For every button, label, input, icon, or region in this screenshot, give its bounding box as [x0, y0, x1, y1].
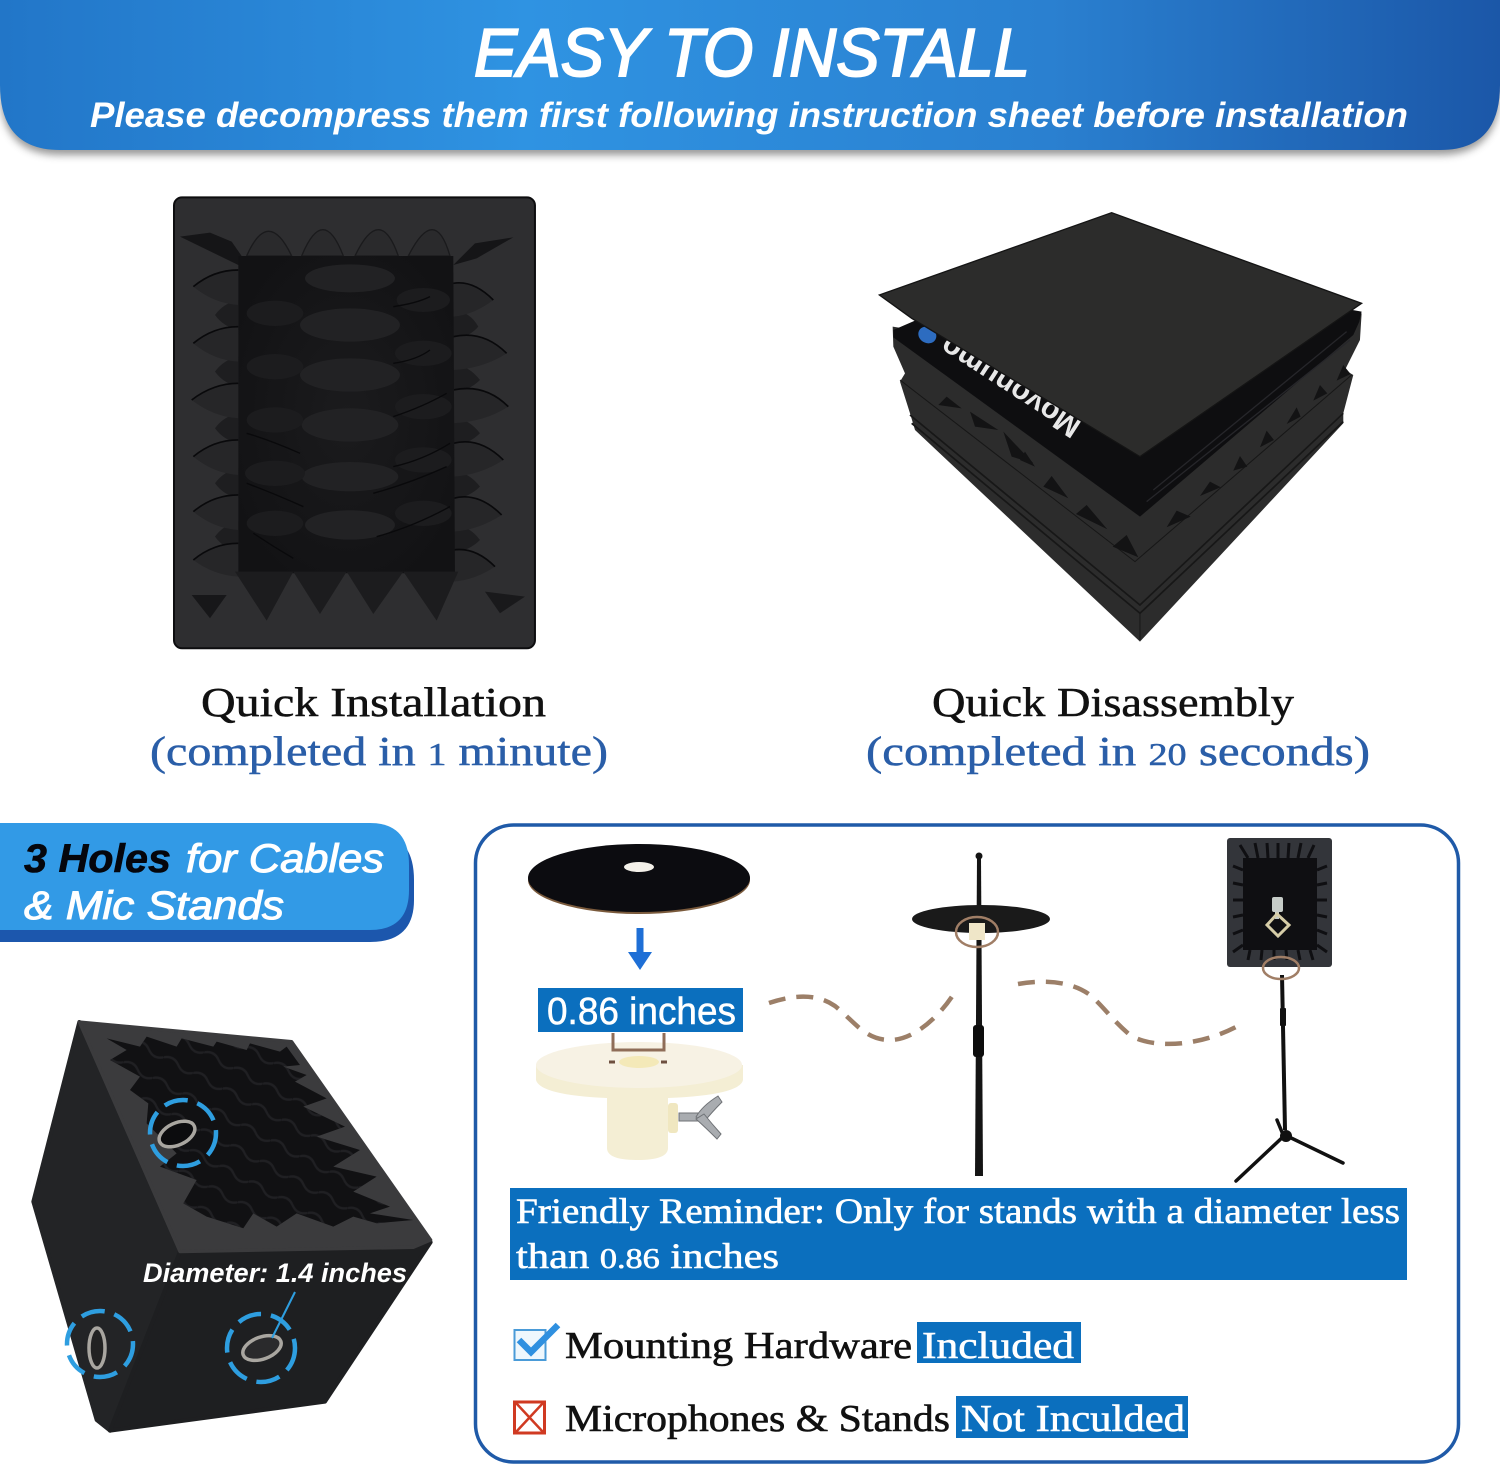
black inner layer [893, 267, 1362, 517]
ring: left hole [67, 1311, 133, 1377]
caption: quick disassembly [866, 679, 1370, 774]
title: EASY TO INSTALL [474, 15, 1030, 91]
right lobes [453, 310, 480, 553]
item: mounting hardware included: Mounting Hardware [565, 1325, 912, 1367]
friendly reminder: Friendly Reminder: Only for stands with a diameter less [516, 1191, 1400, 1231]
item: microphones and stands not included: Not Inculded [961, 1398, 1185, 1440]
diameter callout line [272, 1292, 295, 1338]
caption: quick disassembly: Quick Disassembly [932, 679, 1295, 725]
item: mounting hardware included: Included [922, 1325, 1074, 1367]
top sheet [879, 213, 1362, 457]
friendly reminder: than 0.86 inches [516, 1236, 779, 1276]
foam teeth shadows [938, 365, 1351, 557]
badge: 3 holes for cables: & Mic Stands [24, 884, 284, 928]
ring: top hole [150, 1100, 216, 1166]
photo: assembled foam shield front view [174, 197, 535, 648]
item: microphones and stands not included [565, 1396, 1188, 1440]
icon: checkbox crossed [514, 1402, 544, 1433]
dashed connector 2 [1018, 982, 1236, 1044]
label: 0.86 inches: 0.86 inches [547, 991, 736, 1033]
caption: quick disassembly: (completed in 20 seconds) [866, 728, 1370, 774]
icon: checkbox checked [514, 1325, 558, 1360]
badge: 3 holes for cables: for Cables [186, 837, 384, 881]
caption: quick installation: Quick Installation [201, 679, 546, 725]
caption: quick installation [150, 679, 608, 774]
black disc [528, 844, 750, 914]
badge: 3 holes for cables: 3 Holes [24, 837, 171, 881]
foam layer seams [900, 375, 1352, 640]
blue logo dot [915, 323, 939, 347]
item: microphones and stands not included: Microphones & Stands [565, 1398, 950, 1440]
left lobes [215, 300, 238, 552]
dark core [238, 256, 455, 573]
caption: quick installation: (completed in 1 minute) [150, 728, 608, 774]
photo: foam shield with three holes [33, 1022, 431, 1431]
dashed connector 1 [769, 995, 953, 1040]
plastic mount adapter [536, 1042, 743, 1160]
width bracket [609, 1033, 667, 1062]
photo: stacked foam panels disassembled [879, 213, 1362, 642]
top teeth [247, 230, 450, 256]
panel: mounting instructions [476, 825, 1458, 1462]
subtitle: Please decompress them first following instruction sheet before installation [90, 96, 1408, 135]
diameter label: Diameter: 1.4 inches [143, 1258, 407, 1288]
corner wedges [180, 233, 242, 265]
friendly reminder [510, 1188, 1407, 1280]
microphone [1267, 897, 1289, 936]
down arrow [628, 928, 652, 970]
center ridges [300, 264, 400, 540]
shield on tripod stand [1227, 838, 1343, 1181]
header banner [0, 0, 1500, 155]
bottom teeth [235, 572, 458, 621]
stand with disc [912, 852, 1050, 1176]
ring: right hole [227, 1314, 295, 1382]
foam stack body [893, 313, 1362, 642]
brand text upside down: Moyonumo [934, 329, 1087, 444]
item: mounting hardware included [565, 1322, 1081, 1367]
badge: 3 holes for cables [0, 823, 414, 942]
